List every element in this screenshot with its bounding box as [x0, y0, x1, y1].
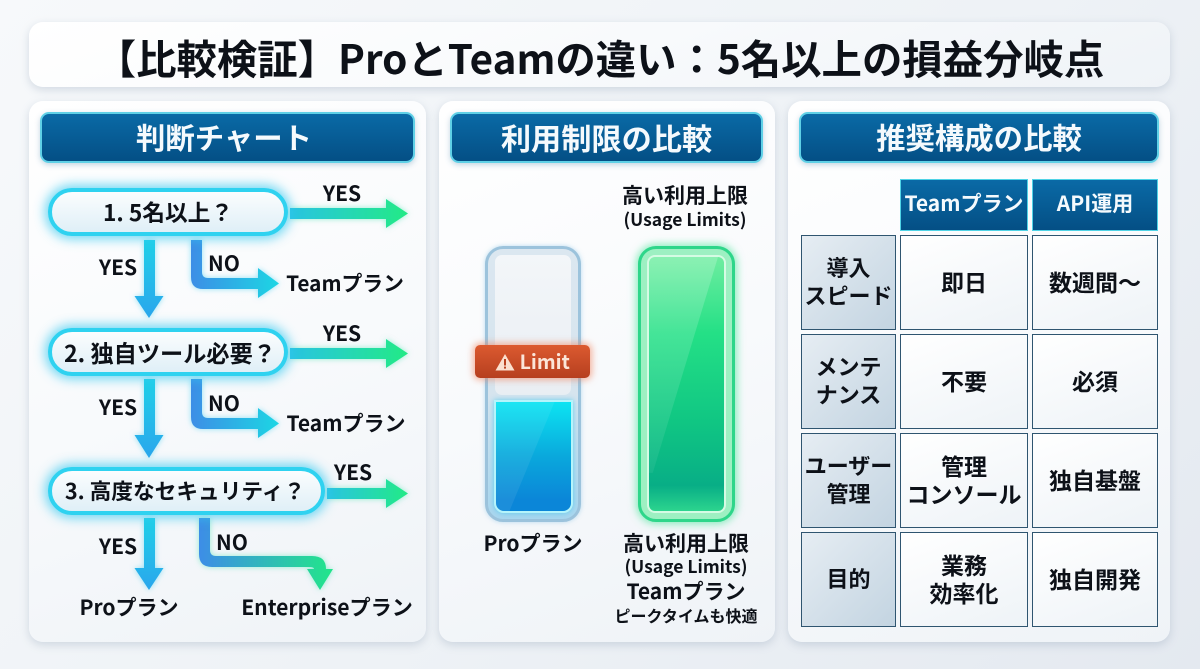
arrow: yes down 1 [134, 240, 164, 318]
top label: usage limits: (Usage Limits) [624, 207, 746, 232]
bar: pro sheen [496, 402, 554, 511]
label: yes: YES [334, 457, 372, 487]
result: team plan: Teamプラン [286, 267, 404, 297]
decision 2 [48, 328, 288, 376]
row head: purpose: 目的 [826, 562, 870, 594]
table header: team plan: Teamプラン [905, 188, 1023, 218]
panel: usage limits [439, 101, 775, 642]
heading: recommended setup: 推奨構成の比較 [876, 116, 1082, 158]
result: pro plan: Proプラン [79, 592, 179, 622]
bar: team plan [638, 246, 735, 522]
row head: user management: ユーザー [805, 449, 892, 481]
table header: api [1032, 179, 1158, 231]
row head: speed [801, 235, 896, 330]
panel: decision chart [29, 101, 426, 642]
decision 1: 1. 5名以上？ [103, 195, 233, 228]
heading: decision chart [40, 112, 415, 163]
row head: purpose [801, 532, 896, 627]
cell: 業務 [941, 547, 987, 581]
arrow: no 1 [191, 240, 279, 298]
cell [1032, 433, 1158, 528]
label: high limit: 高い利用上限 [623, 528, 749, 558]
arrow: yes right 1 [290, 199, 408, 228]
cell: 数週間〜 [1049, 264, 1141, 298]
heading: recommended setup [799, 112, 1159, 163]
arrow: no 2 [191, 379, 279, 438]
label: yes: YES [99, 392, 137, 422]
result: enterprise plan: Enterpriseプラン [241, 592, 413, 622]
cell: コンソール [906, 476, 1022, 510]
label: usage limits: (Usage Limits) [625, 554, 747, 579]
cell [1032, 532, 1158, 627]
decision 2: 2. 独自ツール必要？ [64, 335, 276, 369]
cell: 必須 [1072, 363, 1118, 397]
bar: pro empty track [495, 255, 571, 395]
row head: maintenance: メンテ [815, 350, 882, 382]
bar: team fill [647, 255, 726, 513]
decision 3 [48, 467, 325, 515]
decision 3: 3. 高度なセキュリティ？ [65, 475, 305, 506]
label: pro plan: Proプラン [483, 528, 583, 558]
arrow: yes down 2 [134, 379, 164, 458]
label: no: NO [208, 388, 240, 418]
label: yes: YES [99, 252, 137, 282]
limit badge [475, 345, 590, 378]
row head: speed: スピード [804, 279, 892, 311]
heading: usage limits [450, 112, 763, 163]
cell [900, 334, 1028, 429]
table header: team plan [900, 179, 1028, 231]
panel: recommended setup [788, 101, 1170, 642]
arrow: yes down 3 [134, 518, 164, 590]
label: yes: YES [323, 318, 361, 348]
row head: user management [801, 433, 896, 528]
cell: 独自開発 [1049, 561, 1141, 595]
heading: decision chart: 判断チャート [136, 116, 312, 158]
row head: maintenance [801, 334, 896, 429]
arrow: no 3 [199, 518, 333, 590]
label: no: NO [208, 248, 240, 278]
label: no: NO [216, 527, 248, 557]
arrow: yes right 2 [290, 339, 408, 368]
bar: pro plan [485, 246, 581, 522]
label: yes: YES [323, 178, 361, 208]
cell [900, 235, 1028, 330]
label: team plan: Teamプラン [627, 576, 745, 606]
row head: user management: 管理 [826, 477, 870, 509]
arrow: yes right 3 [327, 479, 408, 508]
row head: maintenance: ナンス [816, 378, 881, 410]
cell [1032, 334, 1158, 429]
table header: api: API運用 [1057, 188, 1133, 218]
cell: 管理 [941, 448, 987, 482]
icon: warning [496, 354, 514, 370]
cell: 即日 [941, 264, 987, 298]
heading: usage limits: 利用制限の比較 [501, 115, 712, 159]
bar: pro fill [494, 400, 573, 513]
top label: high limit: 高い利用上限 [622, 180, 748, 210]
title: 【比較検証】ProとTeamの違い：5名以上の損益分岐点 [96, 27, 1104, 86]
cell [900, 532, 1028, 627]
title card [29, 22, 1170, 87]
decision 1 [48, 188, 288, 236]
label: yes: YES [99, 531, 137, 561]
cell: 独自基盤 [1049, 462, 1141, 496]
label: peak time note: ピークタイムも快適 [614, 603, 758, 627]
cell [1032, 235, 1158, 330]
cell [900, 433, 1028, 528]
limit badge: Limit [520, 346, 570, 375]
bar: team sheen [649, 257, 718, 473]
row head: speed: 導入 [826, 251, 870, 283]
cell: 不要 [941, 363, 987, 397]
result: team plan: Teamプラン [287, 408, 405, 438]
cell: 効率化 [930, 575, 998, 609]
